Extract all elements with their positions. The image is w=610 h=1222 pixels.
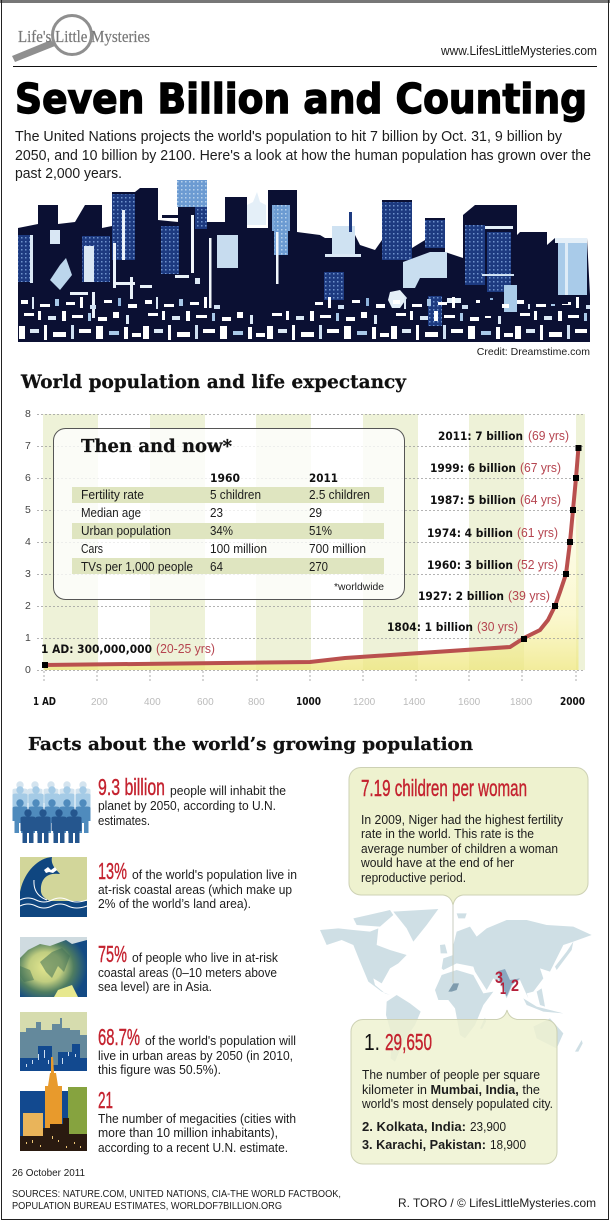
data labels: (61 yrs) bbox=[517, 526, 558, 540]
x axis labels: 800 bbox=[248, 697, 265, 708]
fact: 21 megacities bbox=[98, 1087, 296, 1155]
fact: 9.3 billion: 9.3 billion bbox=[98, 774, 165, 800]
icon: megacity towers bbox=[20, 1057, 87, 1151]
data labels: (64 yrs) bbox=[520, 493, 561, 507]
table contents: 51% bbox=[309, 523, 332, 538]
callout: 29,650 people per square kilometer bbox=[351, 1010, 557, 1164]
fact: 75%: sea level) are in Asia. bbox=[98, 979, 212, 994]
data labels: 1804: 1 billion bbox=[387, 620, 473, 634]
data labels: (39 yrs) bbox=[508, 589, 550, 603]
table contents bbox=[81, 471, 384, 593]
callout: 29,650 people per square kilometer: 29,650 bbox=[385, 1029, 432, 1055]
fact: 75%: 75% bbox=[98, 941, 127, 967]
fact: 21 megacities: The number of megacities (cities with bbox=[98, 1111, 296, 1126]
data labels: (52 yrs) bbox=[517, 558, 558, 572]
table contents: Fertility rate bbox=[81, 487, 144, 502]
x axis labels: 1400 bbox=[403, 697, 426, 708]
fact: 9.3 billion: people will inhabit the bbox=[170, 783, 286, 798]
table contents: 700 million bbox=[309, 541, 366, 556]
data labels bbox=[41, 429, 569, 656]
fact: 13%: at-risk coastal areas (which make up bbox=[98, 882, 292, 897]
x axis labels: 1800 bbox=[510, 697, 533, 708]
data labels: (20-25 yrs) bbox=[156, 642, 215, 656]
callout: 29,650 people per square kilometer: The number of people per square bbox=[362, 1067, 540, 1082]
callout: 7.19 children per woman: In 2009, Niger had the highest fertility bbox=[361, 812, 563, 827]
population curve bbox=[44, 447, 578, 665]
fact: 68.7% bbox=[98, 1024, 296, 1077]
callout: 29,650 people per square kilometer: 1. bbox=[364, 1029, 380, 1055]
x axis labels: 400 bbox=[144, 697, 161, 708]
y axis labels: 7 bbox=[25, 440, 31, 452]
table contents: 270 bbox=[309, 559, 328, 574]
icon: crowd of people bbox=[12, 781, 90, 843]
callout: 29,650 people per square kilometer: 3. Karachi, Pakistan: bbox=[362, 1137, 486, 1152]
fact: 9.3 billion: estimates. bbox=[98, 813, 150, 828]
fact: 21 megacities: more than 10 million inhabitants), bbox=[98, 1125, 278, 1140]
table contents: 64 bbox=[210, 559, 223, 574]
x axis labels bbox=[33, 696, 585, 708]
credit line: R. TORO / © LifesLittleMysteries.com bbox=[398, 1196, 596, 1210]
fact: 13% bbox=[98, 858, 297, 911]
intro text: 2050, and 10 billion by 2100. Here's a look at how the human population has grown over the bbox=[15, 148, 591, 164]
x axis labels: 1200 bbox=[353, 697, 376, 708]
photo: city skyline bbox=[18, 180, 590, 342]
table contents: Urban population bbox=[81, 523, 171, 538]
callout: 29,650 people per square kilometer: kilometer in Mumbai, India, the bbox=[362, 1082, 540, 1097]
map highlight: Niger bbox=[448, 983, 459, 992]
map numbers: 1 bbox=[500, 979, 506, 998]
fact: 13%: 13% bbox=[98, 858, 127, 884]
data labels: 1987: 5 billion bbox=[430, 493, 516, 507]
x axis labels: 1000 bbox=[296, 696, 321, 708]
callout: 29,650 people per square kilometer: 2. Kolkata, India: bbox=[362, 1119, 466, 1134]
fact: 68.7%: this figure was 50.5%). bbox=[98, 1062, 221, 1077]
icon: globe section showing Asia bbox=[20, 937, 87, 997]
fact: 75%: coastal areas (0–10 meters above bbox=[98, 965, 277, 980]
logo: Life's Little Mysteries: Life's Little Mysteries bbox=[18, 27, 150, 46]
data point markers bbox=[42, 445, 582, 668]
data labels: (30 yrs) bbox=[477, 620, 518, 634]
line chart: world population bbox=[25, 408, 585, 708]
callout: 7.19 children per woman: would have at the end of her bbox=[360, 855, 515, 870]
callout: 29,650 people per square kilometer: 23,900 bbox=[470, 1119, 506, 1134]
fact: 75% bbox=[98, 941, 278, 994]
callout: 7.19 children per woman: rate in the world. This rate is the bbox=[361, 826, 534, 841]
table contents: 2.5 children bbox=[309, 487, 370, 502]
y axis labels: 1 bbox=[25, 632, 31, 644]
callout: 29,650 people per square kilometer: 18,900 bbox=[490, 1137, 526, 1152]
table contents: Median age bbox=[81, 505, 141, 520]
intro text: past 2,000 years. bbox=[15, 166, 122, 182]
table contents: 2011 bbox=[309, 471, 338, 485]
fact: 68.7%: live in urban areas by 2050 (in 2010, bbox=[98, 1048, 293, 1063]
table contents: 5 children bbox=[210, 487, 261, 502]
fact: 75%: of people who live in at-risk bbox=[132, 950, 278, 965]
intro text bbox=[15, 129, 591, 182]
data labels: 1960: 3 billion bbox=[427, 558, 513, 572]
data labels: 2011: 7 billion bbox=[438, 429, 523, 443]
x axis labels: 600 bbox=[197, 697, 214, 708]
table contents: *worldwide bbox=[334, 582, 384, 593]
fact: 13%: 2% of the world’s land area). bbox=[98, 896, 251, 911]
data labels: 1974: 4 billion bbox=[427, 526, 513, 540]
fact: 21 megacities: 21 bbox=[98, 1087, 113, 1113]
fact: 9.3 billion bbox=[98, 774, 286, 828]
sources bbox=[12, 1188, 341, 1212]
world map bbox=[320, 909, 592, 1062]
fact: 13%: of the world's population live in bbox=[132, 867, 297, 882]
icon: urban skyline bbox=[20, 1012, 87, 1071]
photo credit: Credit: Dreamstime.com bbox=[477, 346, 590, 358]
y axis labels bbox=[25, 408, 31, 676]
map numbers bbox=[495, 968, 519, 998]
y axis labels: 6 bbox=[25, 472, 31, 484]
y axis labels: 2 bbox=[25, 600, 31, 612]
data labels: (67 yrs) bbox=[520, 461, 561, 475]
map numbers: 3 bbox=[495, 968, 503, 987]
x axis labels: 2000 bbox=[560, 696, 585, 708]
callout: 7.19 children per woman: 7.19 children per woman bbox=[361, 775, 527, 801]
map numbers: 2 bbox=[511, 976, 519, 995]
logo: Life's Little Mysteries bbox=[12, 16, 150, 62]
table contents: 100 million bbox=[210, 541, 267, 556]
table contents: 23 bbox=[210, 505, 223, 520]
date: 26 October 2011 bbox=[12, 1167, 85, 1179]
callout: 7.19 children per woman: reproductive period. bbox=[361, 870, 466, 885]
x axis labels: 200 bbox=[91, 697, 108, 708]
x axis labels: 1600 bbox=[458, 697, 481, 708]
panel: then and now table bbox=[54, 428, 404, 600]
table contents: 34% bbox=[210, 523, 233, 538]
y axis labels: 0 bbox=[25, 664, 31, 676]
callout: 7.19 children per woman: average number of children a woman bbox=[361, 841, 558, 856]
data labels: 1927: 2 billion bbox=[418, 589, 504, 603]
callout: 7.19 children per woman bbox=[349, 768, 588, 983]
callout: 29,650 people per square kilometer: world's most densely populated city. bbox=[361, 1096, 553, 1111]
fact: 68.7%: of the world's population will bbox=[145, 1033, 296, 1048]
data labels: 1999: 6 billion bbox=[430, 461, 516, 475]
icon: tsunami wave bbox=[20, 857, 87, 917]
heading: facts: Facts about the world’s growing population bbox=[28, 734, 473, 755]
y axis labels: 4 bbox=[25, 536, 31, 548]
sources: SOURCES: NATURE.COM, UNITED NATIONS, CIA-THE WORLD FACTBOOK, bbox=[12, 1188, 341, 1200]
fact: 21 megacities: according to a recent U.N. estimate. bbox=[98, 1140, 288, 1155]
y axis labels: 8 bbox=[25, 408, 31, 420]
map highlight: India bbox=[498, 969, 520, 997]
data labels: 1 AD: 300,000,000 bbox=[41, 642, 152, 656]
sources: POPULATION BUREAU ESTIMATES, WORLDOF7BILLION.ORG bbox=[12, 1200, 282, 1212]
data labels: (69 yrs) bbox=[528, 429, 569, 443]
table contents: TVs per 1,000 people bbox=[81, 559, 193, 574]
x axis labels: 1 AD bbox=[33, 696, 56, 708]
table contents: Cars bbox=[81, 541, 103, 556]
y axis labels: 3 bbox=[25, 568, 31, 580]
fact: 9.3 billion: planet by 2050, according to U.N. bbox=[98, 798, 276, 813]
heading: chart: World population and life expectancy bbox=[20, 372, 407, 393]
table heading: Then and now* bbox=[81, 437, 232, 457]
y axis labels: 5 bbox=[25, 504, 31, 516]
website address: www.LifesLittleMysteries.com bbox=[440, 44, 597, 58]
table contents: 1960 bbox=[210, 471, 240, 485]
intro text: The United Nations projects the world's population to hit 7 billion by Oct. 31, 9 billion by bbox=[15, 129, 563, 145]
table contents: 29 bbox=[309, 505, 322, 520]
fact: 68.7%: 68.7% bbox=[98, 1024, 140, 1050]
